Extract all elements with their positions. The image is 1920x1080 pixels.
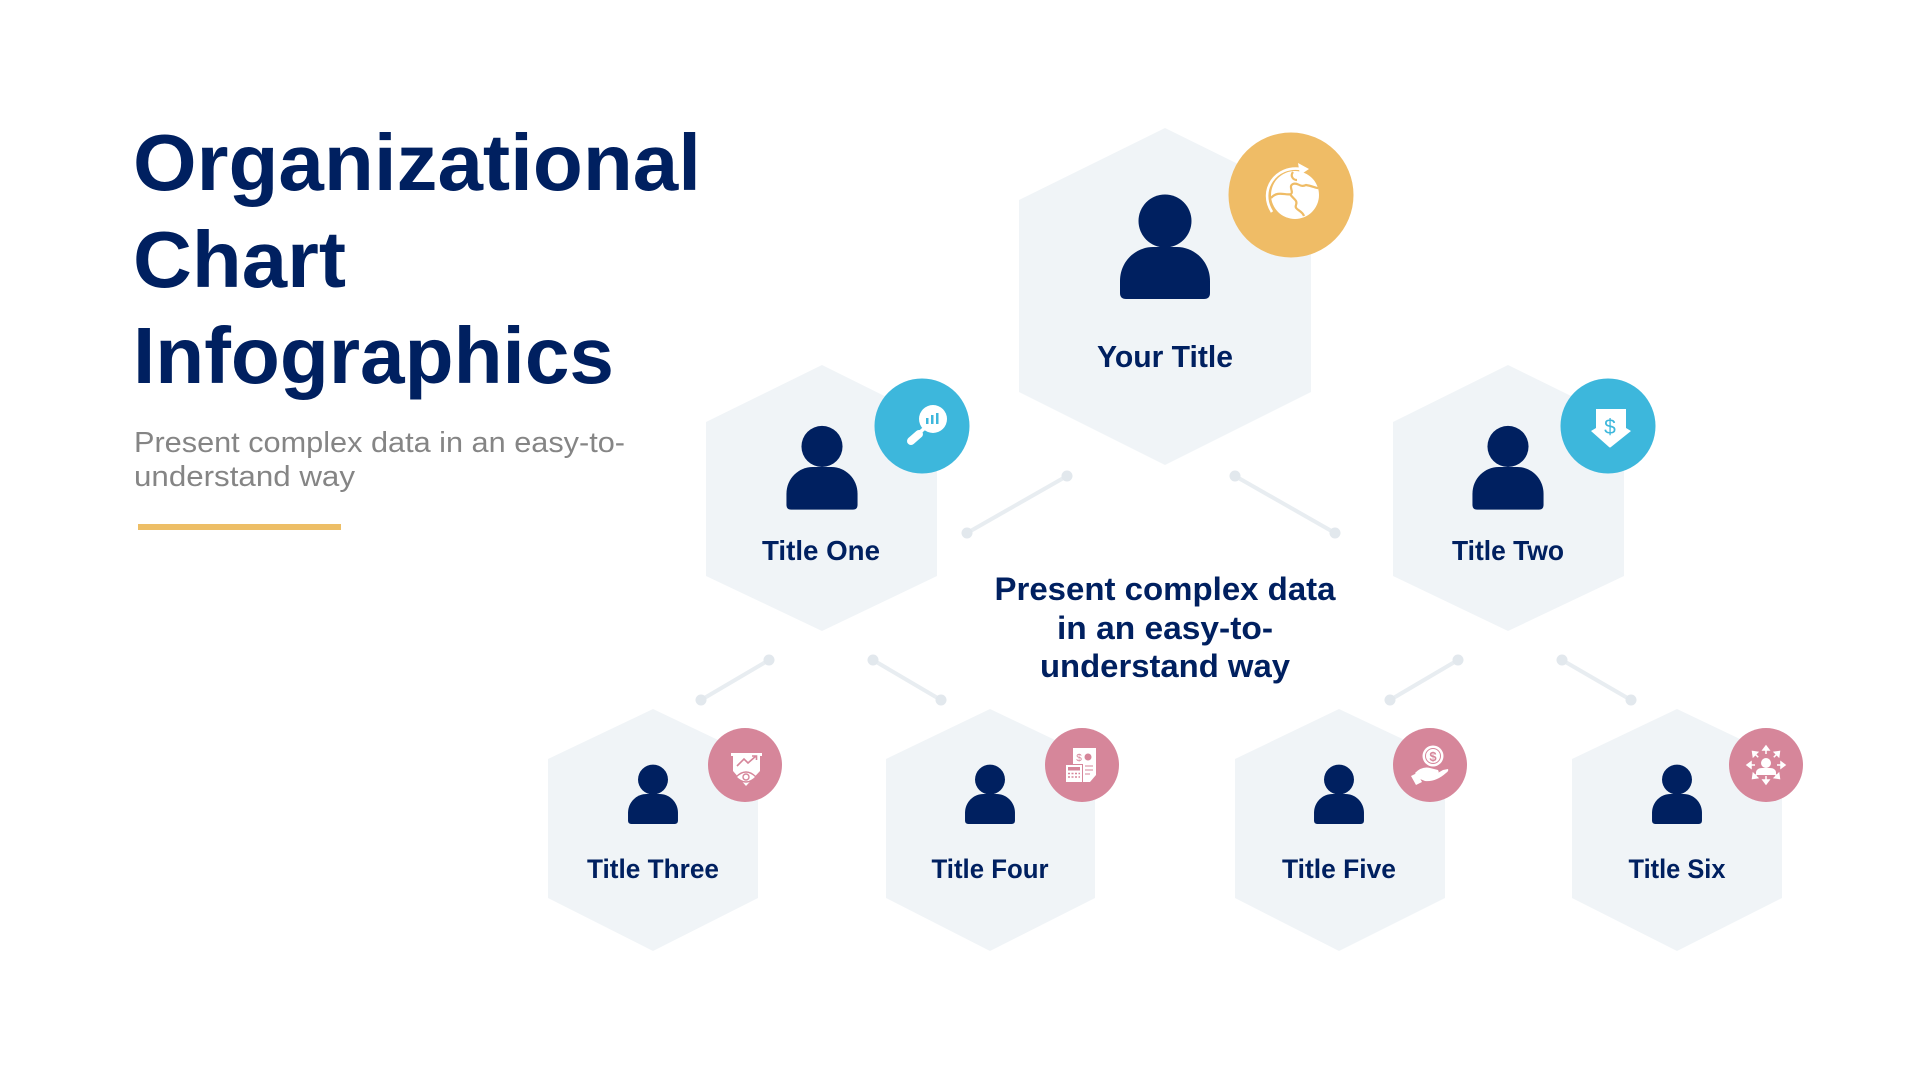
icon: person <box>1314 765 1364 824</box>
badge: finance document <box>1045 728 1119 802</box>
icon: person <box>628 765 678 824</box>
panel: your title <box>1019 128 1354 465</box>
icon: person <box>786 426 858 510</box>
center text: in an easy-to- <box>1057 610 1273 646</box>
badge: hand and coin <box>1393 728 1467 802</box>
title: Infographics <box>133 311 614 400</box>
badge: hand and coin: $ <box>1429 749 1437 764</box>
title: Chart <box>133 215 346 304</box>
panel: title six <box>1572 709 1803 951</box>
panel: title five <box>1235 709 1467 951</box>
label: title two: Title Two <box>1452 535 1564 566</box>
badge: globe <box>1228 132 1354 258</box>
title: Organizational <box>133 118 701 207</box>
icon: person <box>1652 765 1702 824</box>
center text <box>994 571 1336 684</box>
icon: person <box>1472 426 1544 510</box>
connectors <box>696 470 1636 706</box>
center text: understand way <box>1040 648 1290 684</box>
subtitle: Present complex data in an easy-to- <box>134 427 625 459</box>
label: title five: Title Five <box>1282 854 1396 884</box>
subtitle <box>134 427 625 493</box>
label: title four: Title Four <box>932 854 1049 884</box>
label: your title: Your Title <box>1097 339 1233 374</box>
badge: finance document: $ <box>1076 753 1082 764</box>
label: title six: Title Six <box>1628 854 1726 884</box>
label: title three: Title Three <box>587 854 719 884</box>
panel: title two <box>1393 365 1656 631</box>
subtitle: understand way <box>134 461 356 493</box>
center text: Present complex data <box>994 571 1336 607</box>
badge: down arrow dollar <box>1560 378 1656 474</box>
badge: person with arrows <box>1729 728 1803 802</box>
panel: title three <box>548 709 782 951</box>
panel: title one <box>706 365 970 631</box>
badge: eye chart <box>708 728 782 802</box>
panel: title four <box>886 709 1119 951</box>
label: title one: Title One <box>762 535 880 566</box>
icon: person <box>965 765 1015 824</box>
badge: down arrow dollar: $ <box>1604 416 1616 439</box>
badge: magnifier <box>874 378 970 474</box>
title <box>133 118 701 400</box>
icon: person <box>1120 194 1210 299</box>
accent rule <box>138 524 341 530</box>
